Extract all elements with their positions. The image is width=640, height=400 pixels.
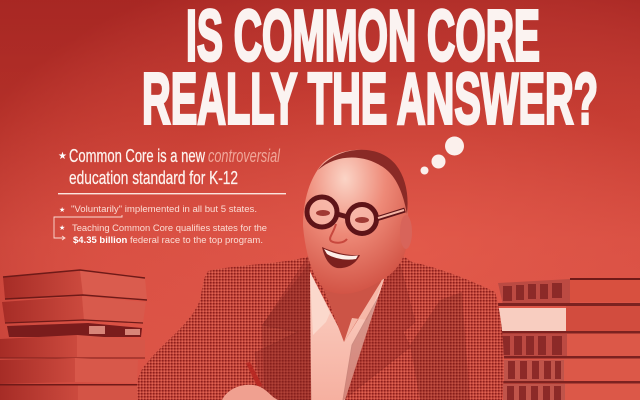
jacket [137,251,504,400]
shirt collar [310,272,330,335]
pencil [246,362,262,388]
fact two continued: $4.35 billion federal race to the top program. [73,235,263,246]
fact two: Teaching Common Core qualifies states for the [72,223,267,234]
icon: star bullet: ★ [59,206,65,214]
icon: star bullet: ★ [59,224,65,232]
statement line one: Common Core is a new [69,145,205,166]
mouth [322,247,360,268]
face [303,150,408,294]
book [504,356,640,381]
book [498,278,640,305]
shirt collar [344,272,387,342]
hair [318,150,408,214]
person [137,150,504,400]
book [3,270,147,300]
emphasis word: controversial [208,145,281,166]
icon: star bullet: ★ [58,151,67,162]
hand [222,385,278,400]
ear [400,215,412,249]
shirt [310,270,387,400]
fact one: "Voluntarily" implemented in all but 5 states. [71,204,257,215]
book [0,384,140,400]
nose shadow [330,224,347,243]
statement line two: education standard for K-12 [69,167,238,188]
glasses [307,197,405,234]
eye [316,210,330,216]
jacket shading [262,262,470,400]
right book stack [497,278,640,400]
book [7,323,142,337]
book [2,296,146,323]
title [142,0,598,140]
book [498,303,640,331]
book [497,331,640,357]
eye [355,217,369,223]
neck [312,262,388,342]
icon: thought bubbles [420,136,464,174]
book [0,335,145,358]
teeth [324,249,358,260]
left book stack [0,270,147,400]
lapel right [343,253,415,400]
arrow: connector from Voluntarily to amount [54,215,122,240]
book [0,358,138,384]
text block: intro statement [58,145,281,188]
text block: supporting facts [59,204,267,246]
lapel left [255,257,311,400]
book [503,381,640,400]
